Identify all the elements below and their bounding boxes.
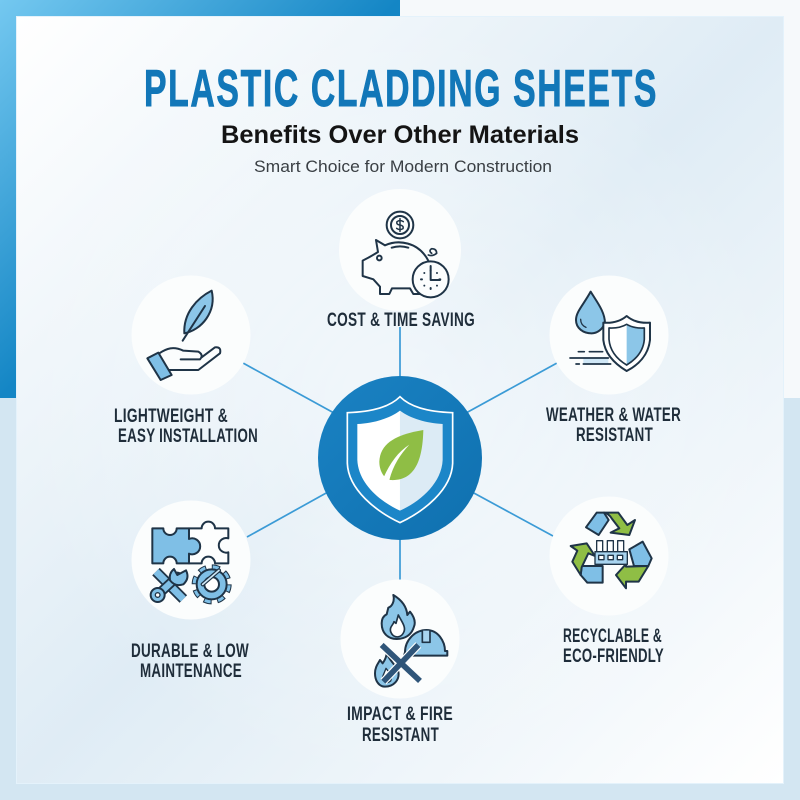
connector lines [243,327,557,581]
icon: water drop and shield [570,292,650,371]
icon: recycling arrows with factory [571,513,652,588]
label: recyclable: RECYCLABLE & [563,626,662,647]
icon disc: impact [340,580,460,698]
icon: feather over hand [147,291,220,380]
benefit: cost and time saving [327,189,475,331]
icon: piggy bank with coin and clock [363,212,449,297]
icon: puzzle and tools [151,522,229,602]
icon: flames, helmet and cross [375,595,447,687]
label: lightweight: LIGHTWEIGHT & [114,406,228,427]
icon disc: weather [550,276,668,394]
label: impact [347,704,453,746]
benefit: impact and fire [340,580,460,746]
subtitle: Benefits Over Other Materials [221,121,579,149]
icon disc: lightweight [132,276,250,394]
benefit: recyclable [550,496,668,667]
central badge [318,376,482,540]
badge disc [318,376,482,540]
shield with leaf [347,397,453,523]
label: weather [546,405,681,446]
label: impact: RESISTANT [362,725,439,746]
benefit: weather and water [546,276,681,446]
benefit: lightweight [114,276,258,447]
label: lightweight [114,406,258,447]
label: durable: MAINTENANCE [140,661,242,682]
label: lightweight: EASY INSTALLATION [118,426,258,447]
icon disc: cost [339,189,461,311]
icon disc: durable [132,500,250,620]
label: cost: COST & TIME SAVING [327,310,475,331]
label: recyclable: ECO-FRIENDLY [563,646,664,667]
label: impact: IMPACT & FIRE [347,704,453,725]
benefit: durable [131,500,250,682]
label: durable: DURABLE & LOW [131,641,249,662]
tagline: Smart Choice for Modern Construction [254,157,552,176]
label: weather: WEATHER & WATER [546,405,681,426]
label: durable [131,641,249,682]
icon disc: recyclable [550,496,668,616]
label: weather: RESISTANT [576,425,653,446]
label: recyclable [563,626,664,667]
